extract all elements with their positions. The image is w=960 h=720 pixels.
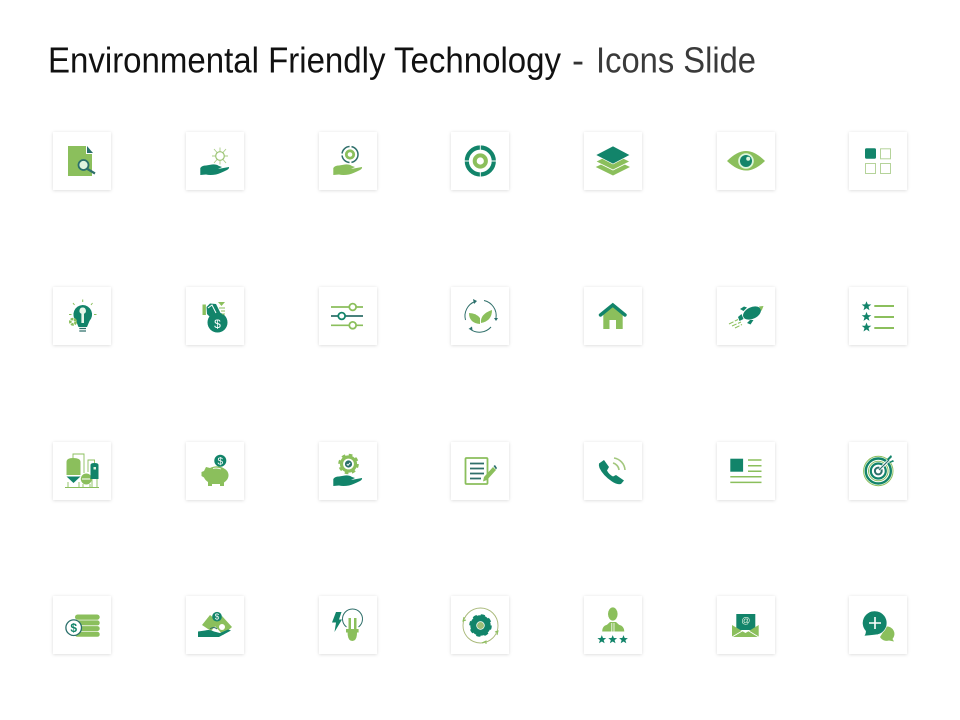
tile: chat add [849,596,907,654]
icon: cash on hand: $ [215,613,220,622]
tile: coin stack [53,596,111,654]
icon: hand with sun [200,148,229,175]
icon: document search [68,146,95,176]
icon: form with pencil [466,458,497,484]
icon: squares grid [865,148,890,174]
tile: gear on hand [319,442,377,500]
tile: squares grid [849,132,907,190]
icon: coin stack: $ [70,621,77,635]
icon: factory tanks [65,454,99,488]
tile: factory tanks [53,442,111,500]
icon: phone call [599,458,625,484]
tile: person rating [584,596,642,654]
icon: piggy bank: $ [218,456,224,467]
tile: hand with sun [186,132,244,190]
tile: gear cycle [451,596,509,654]
icon: person rating [597,607,628,643]
tile: light bulb with key [53,287,111,345]
tile: hand with gear [319,132,377,190]
tile: bullseye target [849,442,907,500]
title: Icons Slide [596,40,756,80]
icon: news layout [730,459,762,482]
icon: money bag: $ [214,317,221,331]
tile: sliders [319,287,377,345]
tile: phone call [584,442,642,500]
tile: email envelope [717,596,775,654]
title: - [572,40,584,80]
icon: email envelope: @ [741,616,750,626]
icon: rocket [729,304,764,328]
tile: rocket [717,287,775,345]
tile: money bag [186,287,244,345]
icon: target ring [464,145,496,177]
icon: gear on hand [333,455,362,486]
icon: chat add [862,611,894,642]
tile: layers [584,132,642,190]
icon: gear cycle [463,608,498,644]
icon: bolt and bulb [332,609,362,641]
tile: eye [717,132,775,190]
tile: document search [53,132,111,190]
icon: eye [727,151,765,170]
icon: house [600,305,625,329]
tile: star list [849,287,907,345]
tile: bolt and bulb [319,596,377,654]
icon: bullseye target [864,455,894,486]
title: Environmental Friendly Technology [48,40,562,80]
tile: leaves cycle [451,287,509,345]
tile: news layout [717,442,775,500]
tile: form with pencil [451,442,509,500]
tile: house [584,287,642,345]
icon: leaves cycle [465,299,498,332]
icon: light bulb with key [69,300,96,331]
icon: sliders [331,304,363,329]
tile: target ring [451,132,509,190]
icon: star list [862,301,894,332]
icon: hand with gear [333,146,362,175]
icon: layers [596,146,630,176]
tile: piggy bank [186,442,244,500]
tile: cash on hand [186,596,244,654]
